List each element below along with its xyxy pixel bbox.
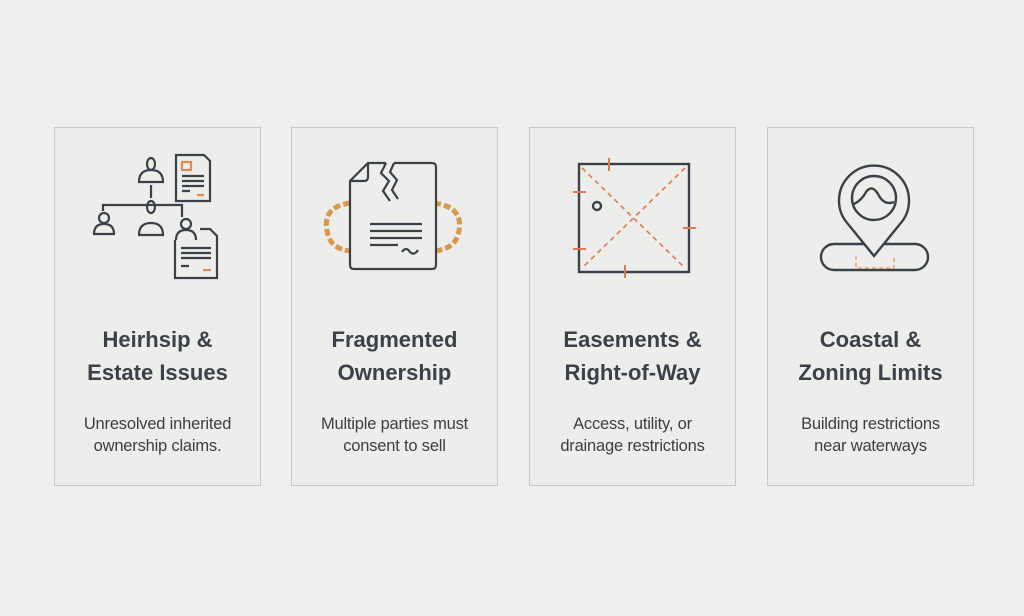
description	[84, 415, 231, 455]
icon: family tree with documents	[92, 154, 218, 280]
card: easements	[529, 127, 736, 486]
title: Zoning Limits	[798, 360, 943, 385]
title: Right-of-Way	[564, 360, 701, 385]
icon: parcel with easement lines	[573, 158, 696, 278]
card: heirship	[54, 127, 261, 486]
description: Access, utility, or	[573, 415, 692, 433]
title: Ownership	[338, 360, 451, 385]
icon: broken deed with chains	[324, 162, 462, 270]
description: Unresolved inherited	[84, 415, 231, 433]
description	[801, 415, 940, 455]
description: drainage restrictions	[560, 437, 705, 455]
description: consent to sell	[343, 437, 446, 455]
description: Building restrictions	[801, 415, 940, 433]
title	[332, 327, 457, 385]
title	[798, 327, 943, 385]
description: ownership claims.	[94, 437, 221, 455]
description: near waterways	[814, 437, 927, 455]
title: Easements &	[563, 327, 702, 352]
title	[563, 327, 702, 385]
title	[87, 327, 228, 385]
card: fragmented	[291, 127, 498, 486]
title: Heirhsip &	[102, 327, 213, 352]
card: coastal	[767, 127, 974, 486]
description: Multiple parties must	[321, 415, 468, 433]
description	[321, 415, 468, 455]
title: Coastal &	[820, 327, 921, 352]
description	[560, 415, 705, 455]
icon: map pin with waterway	[820, 164, 930, 272]
title: Estate Issues	[87, 360, 228, 385]
title: Fragmented	[332, 327, 457, 352]
